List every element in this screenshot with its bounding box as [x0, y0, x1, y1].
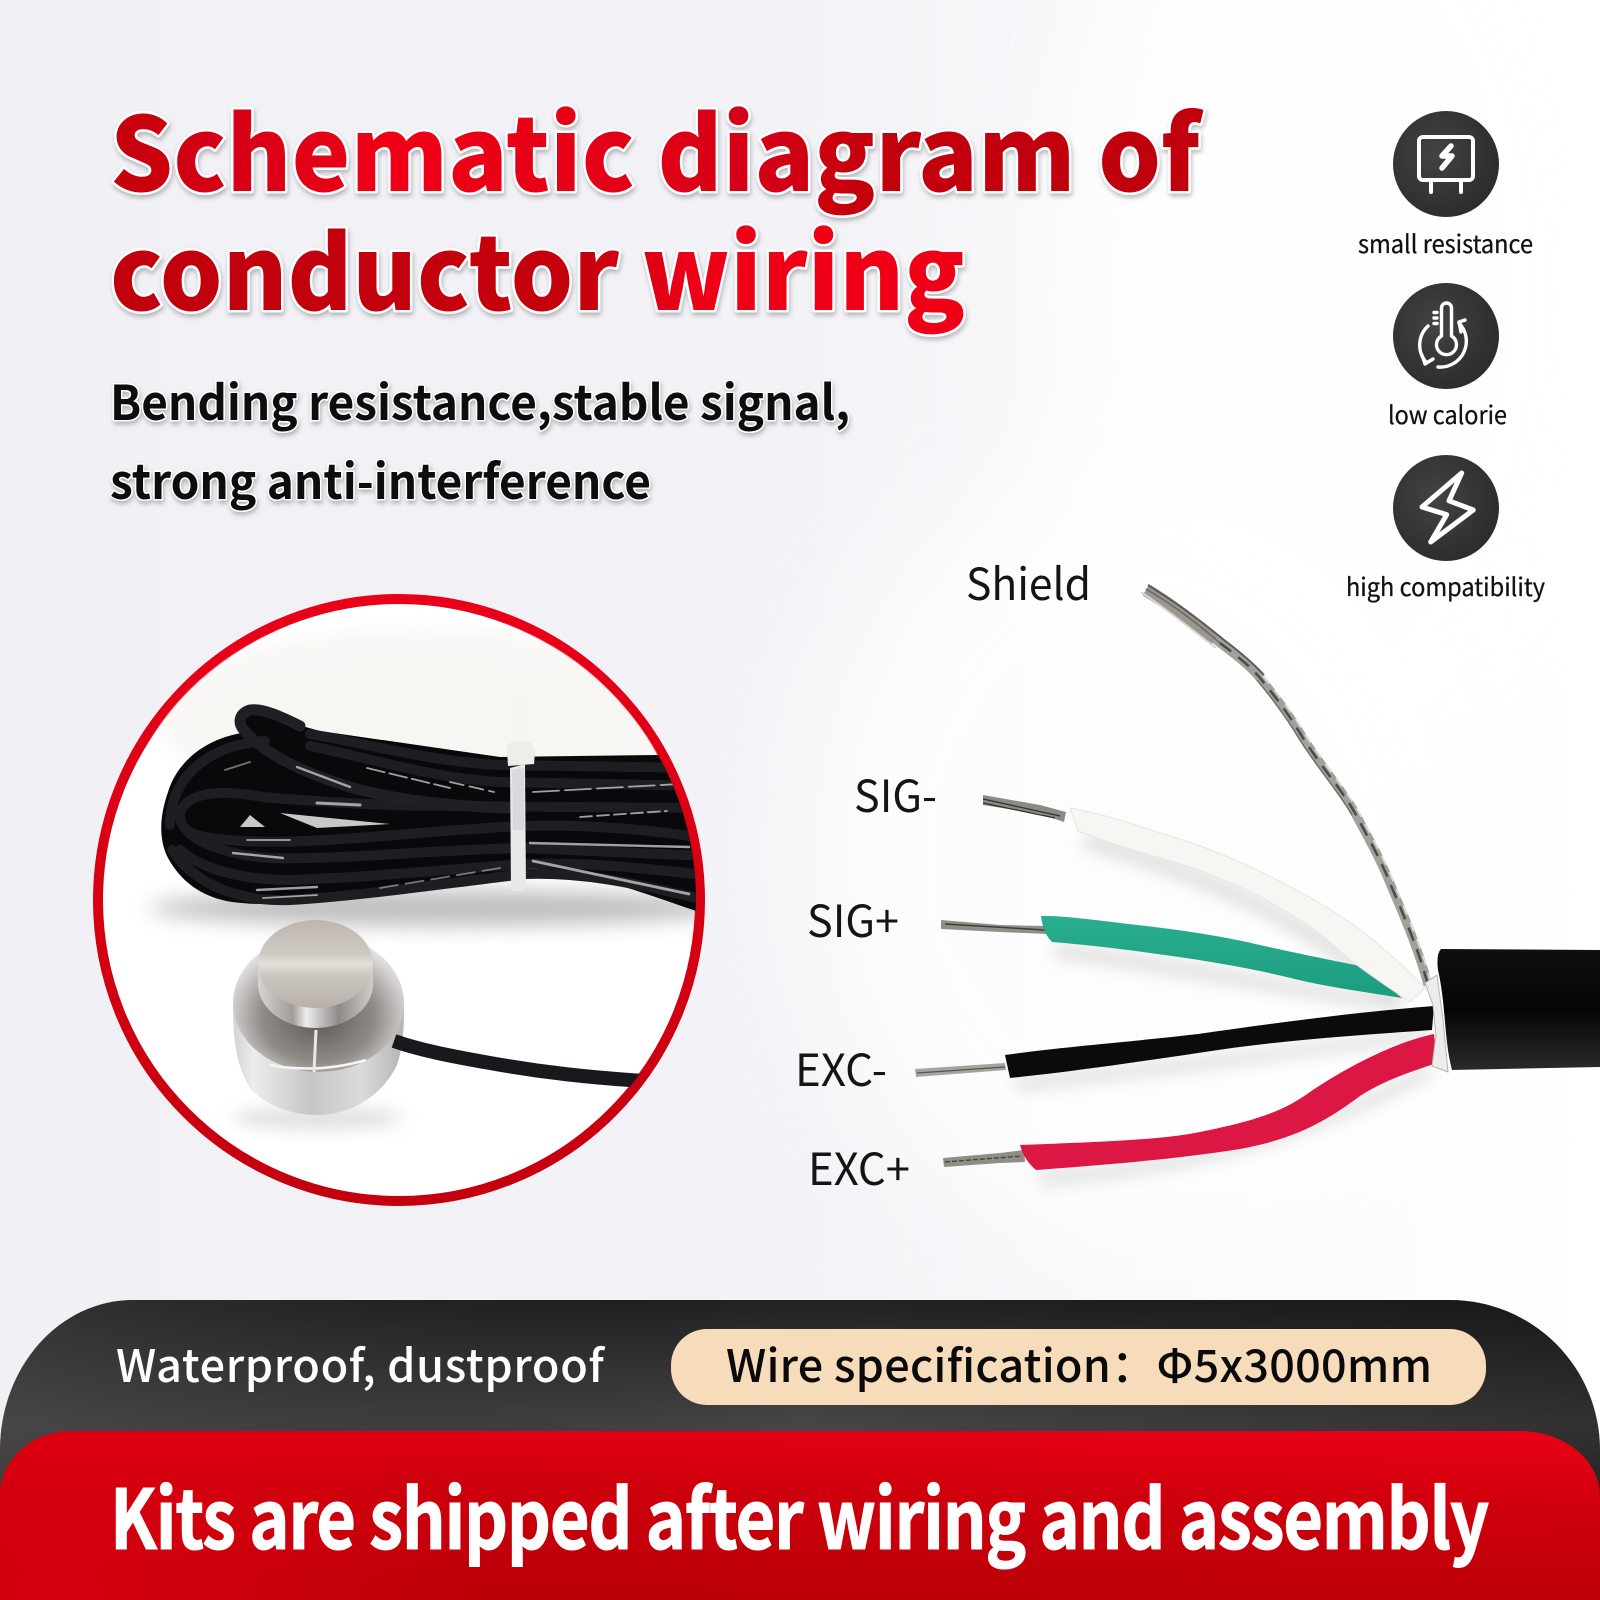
icon: thermometer with cycle arrows: [1420, 303, 1466, 367]
feature: high compatibility: [1346, 455, 1545, 604]
cable foil: [1425, 975, 1448, 1072]
light wedges visible through the coil: [240, 813, 390, 828]
wire: SIG- bare strands: [983, 795, 1066, 822]
cable diagram: [915, 585, 1600, 1170]
wire label: EXC-: EXC-: [795, 1035, 887, 1099]
subtitle: strong anti-interference: [110, 443, 651, 513]
wire: EXC- black: [915, 1006, 1434, 1078]
panel: dark band: [0, 1300, 1600, 1600]
subtitle: [110, 364, 850, 513]
label: low calorie: low calorie: [1388, 396, 1507, 432]
photo: white cable tie: [507, 741, 535, 892]
label: small resistance: small resistance: [1358, 225, 1533, 261]
text: waterproof: Waterproof, dustproof: [116, 1330, 605, 1395]
wire: SIG+ green: [941, 916, 1402, 998]
panel: circular product photo: [98, 599, 730, 1201]
title: Schematic diagram of: [110, 74, 1204, 221]
subtitle: Bending resistance,stable signal,: [110, 364, 850, 434]
wire: EXC+ red: [943, 1034, 1437, 1170]
icon: resistor board: [1419, 137, 1473, 192]
icon: lightning bolt: [1422, 473, 1473, 542]
cable jacket: [1437, 949, 1600, 1070]
wire label: EXC+: EXC+: [808, 1134, 910, 1198]
photo: coiled black cable bundle: [161, 709, 720, 914]
wire label: Shield: Shield: [966, 549, 1091, 613]
spec pill: Wire specification：Φ5x3000mm: [726, 1330, 1432, 1395]
photo: sensor cable: [394, 1041, 660, 1082]
title: [110, 74, 1204, 340]
panel: red banner: [0, 1431, 1600, 1600]
wire label: SIG+: SIG+: [807, 886, 899, 950]
label: high compatibility: high compatibility: [1346, 568, 1545, 604]
wire: SIG- white: [1070, 808, 1425, 1002]
wire label: SIG-: SIG-: [854, 761, 937, 825]
wire shadows: [1015, 840, 1430, 1178]
feature: low calorie: [1388, 283, 1507, 432]
photo: stainless steel sensor: [233, 920, 404, 1115]
loose loop: [240, 710, 510, 808]
feature: small resistance: [1358, 111, 1533, 261]
wire: shield braid: [1141, 585, 1431, 985]
title: conductor wiring: [110, 193, 965, 340]
